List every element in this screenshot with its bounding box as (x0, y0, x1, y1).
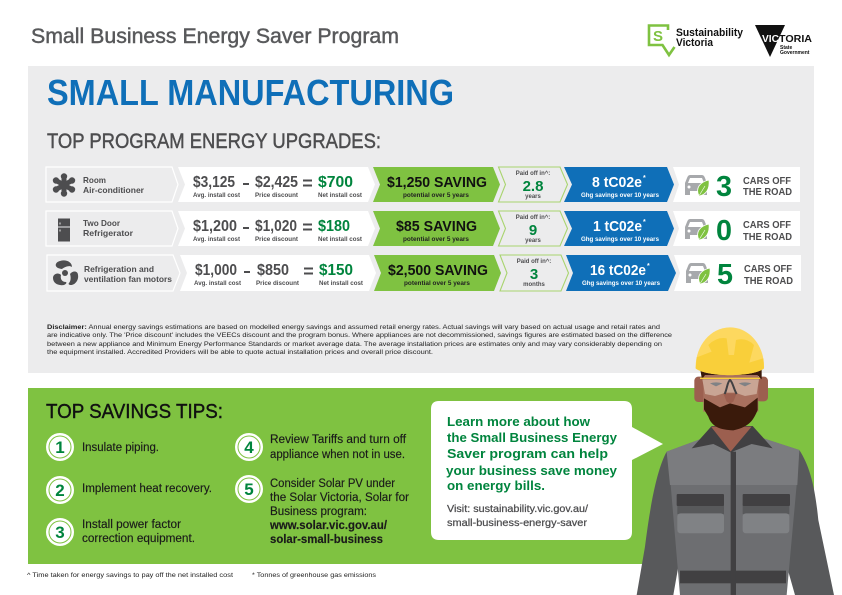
tip 5 (236, 476, 409, 546)
tip 3: Install power factor (82, 519, 181, 531)
cars off the road: CARS OFF (743, 219, 792, 231)
icon: car and leaf (686, 263, 710, 284)
cars off the road: 3 (716, 171, 732, 203)
payback chevron: Paid off in^: (517, 259, 551, 265)
row: refrigeration and ventilation fan motors (47, 255, 801, 291)
collar (692, 426, 773, 452)
emissions chevron (566, 255, 676, 291)
cost equation: $1,020 (255, 218, 297, 235)
hard hat (696, 327, 764, 375)
appliance name (84, 264, 172, 284)
tip 5: 5 (244, 480, 254, 499)
callout: learn more: on energy bills. (447, 479, 545, 493)
icon: fan (53, 260, 78, 285)
emissions chevron: * (647, 263, 650, 270)
disclaimer: the equipment installed. Accredited Providers will be able to quote actual installation prices and overall price discount. (47, 349, 433, 356)
panel: savings tips (28, 388, 814, 564)
tip 5: solar-small-business (270, 534, 383, 546)
cost equation: Price discount (255, 193, 298, 199)
saving chevron: $1,250 SAVING (387, 175, 487, 191)
disclaimer: Disclaimer: Annual energy savings estimations are based on modelled energy savings and assumed retail energy rates. Actual savings will vary based on actual usage and retail rates and (47, 324, 661, 331)
title: program name: Small Business Energy Saver Program (31, 25, 399, 48)
cars off the road: 5 (717, 259, 733, 291)
beard (704, 398, 758, 430)
logo: Victoria State Government: Government (780, 50, 810, 56)
torso (667, 435, 799, 595)
callout: learn more (431, 401, 663, 540)
cost equation: Net install cost (318, 237, 362, 243)
cars off the road (673, 211, 800, 247)
emissions chevron (564, 167, 674, 202)
cost equation: $1,200 (193, 218, 237, 235)
callout: learn more: Learn more about how (447, 415, 590, 429)
payback chevron: years (525, 194, 542, 200)
disclaimer (47, 324, 673, 356)
emissions chevron: * (643, 219, 646, 226)
appliance name (83, 218, 134, 238)
payback chevron: 3 (530, 266, 538, 283)
payback chevron (498, 211, 568, 246)
cost equation (178, 167, 375, 202)
belt (680, 571, 786, 583)
tip 2: Implement heat recovery. (82, 483, 212, 495)
neck (711, 427, 752, 452)
appliance name: Refrigerator (83, 228, 134, 238)
cost equation: $150 (319, 262, 353, 279)
saving chevron (373, 211, 500, 246)
saving chevron: potential over 5 years (404, 280, 471, 287)
logo: Sustainability Victoria (649, 26, 744, 55)
heading: top savings tips: TOP SAVINGS TIPS: (46, 401, 223, 423)
cost equation: Net install cost (319, 281, 363, 287)
payback chevron: years (525, 238, 542, 244)
emissions chevron: * (643, 175, 646, 182)
tip 3: 3 (55, 523, 65, 542)
callout: learn more: the Small Business Energy (447, 431, 617, 445)
row: two door refrigerator (46, 211, 800, 247)
emissions chevron: Ghg savings over 10 years (581, 236, 659, 243)
tip 5: Business program: (270, 506, 367, 518)
cost equation: Avg. install cost (194, 281, 241, 287)
payback chevron: Paid off in^: (516, 171, 550, 177)
footnote: payback: ^ Time taken for energy savings to pay off the net installed cost (27, 572, 233, 579)
cars off the road: CARS OFF (744, 263, 793, 275)
heading: small manufacturing: SMALL MANUFACTURING (47, 72, 454, 113)
saving chevron (374, 255, 501, 291)
saving chevron (373, 167, 500, 202)
cost equation: $850 (257, 262, 289, 279)
tip 5: the Solar Victoria, Solar for (270, 492, 409, 504)
hair (700, 370, 762, 379)
tip 4: appliance when not in use. (270, 449, 405, 461)
logo: Sustainability Victoria: Victoria (676, 37, 714, 49)
icon: car and leaf (685, 175, 709, 196)
cars off the road: THE ROAD (743, 231, 792, 243)
appliance tag (46, 167, 178, 202)
appliance name: Air-conditioner (83, 185, 145, 195)
payback chevron: Paid off in^: (516, 215, 550, 221)
cost equation (180, 255, 376, 291)
saving chevron: $85 SAVING (396, 219, 477, 235)
appliance name (83, 175, 145, 195)
payback chevron: 9 (529, 222, 537, 239)
logo: Victoria State Government: State (780, 45, 792, 51)
cars off the road (674, 255, 801, 291)
emissions chevron: 8 tC02e (592, 174, 642, 191)
disclaimer: between a new appliance and Minimum Energy Performance Standards or market average data. The average installation prices are estimates only and may vary considerably depending on (47, 341, 663, 348)
callout: learn more: your business save money (446, 464, 617, 478)
tip 1: 1 (55, 438, 65, 457)
heading: top program energy upgrades: TOP PROGRAM ENERGY UPGRADES: (47, 130, 381, 153)
safety glasses (700, 378, 760, 403)
row: room air-conditioner (46, 167, 800, 203)
tip 1: Insulate piping. (82, 442, 159, 454)
cost equation: $180 (318, 218, 350, 235)
zip (731, 452, 736, 595)
appliance name: ventilation fan motors (84, 274, 172, 284)
face (703, 370, 758, 412)
icon: snowflake (53, 173, 75, 197)
tip 4: Review Tariffs and turn off (270, 434, 407, 446)
cars off the road: 0 (716, 215, 732, 247)
cost equation: $700 (318, 174, 353, 191)
tip 3: correction equipment. (82, 533, 195, 545)
logo: Victoria State Government: TORIA (779, 33, 812, 45)
appliance tag (47, 255, 180, 291)
callout: learn more: Saver program can help (447, 447, 608, 461)
appliance name: Refrigeration and (84, 264, 154, 274)
payback chevron (500, 255, 568, 291)
tip 5: Consider Solar PV under (270, 478, 395, 490)
emissions chevron: Ghg savings over 10 years (581, 192, 659, 199)
cost equation: Net install cost (318, 193, 362, 199)
tip 2 (48, 478, 212, 502)
emissions chevron: Ghg savings over 10 years (582, 280, 660, 287)
sleeves (637, 452, 681, 595)
tip 3 (48, 519, 195, 545)
cost equation: Avg. install cost (193, 193, 240, 199)
emissions chevron: 1 tC02e (593, 218, 642, 235)
cost equation: $3,125 (193, 174, 235, 191)
callout: learn more: small-business-energy-saver (447, 518, 588, 529)
tip 4 (236, 434, 407, 461)
tip 5: www.solar.vic.gov.au/ (269, 520, 388, 532)
emissions chevron (564, 211, 674, 246)
payback chevron (498, 167, 568, 202)
appliance tag (46, 211, 178, 246)
chest pockets (677, 494, 790, 533)
tip 4: 4 (244, 438, 254, 457)
cars off the road: THE ROAD (743, 186, 792, 198)
logo: Sustainability Victoria: Sustainability (676, 27, 744, 39)
icon: car and leaf (685, 219, 709, 240)
cost equation: $2,425 (255, 174, 298, 191)
logo: Sustainability Victoria: S (653, 28, 663, 45)
saving chevron: potential over 5 years (403, 236, 470, 243)
payback chevron: 2.8 (523, 178, 543, 195)
cost equation: Price discount (255, 237, 298, 243)
tip 1 (48, 434, 159, 460)
disclaimer: are indicative only. The 'Price discount' includes the VEECs discount and the program bonus. Where appliances are not decommissioned, savings figures are estimated based on the difference (47, 332, 673, 339)
appliance name: Two Door (83, 218, 121, 228)
emissions chevron: 16 tC02e (590, 262, 646, 279)
cost equation (178, 211, 375, 246)
cars off the road: CARS OFF (743, 175, 792, 187)
payback chevron: months (523, 282, 545, 288)
logo: Victoria State Government (755, 25, 812, 57)
cost equation: Avg. install cost (193, 237, 240, 243)
tip 2: 2 (55, 481, 65, 500)
footnote: emissions: * Tonnes of greenhouse gas emissions (252, 572, 377, 579)
illustration: worker (637, 327, 834, 595)
cost equation: Price discount (256, 281, 299, 287)
ears (694, 377, 768, 402)
cost equation: $1,000 (195, 262, 237, 279)
appliance name: Room (83, 175, 106, 185)
callout: learn more: Visit: sustainability.vic.gov.au/ (447, 504, 588, 515)
cars off the road: THE ROAD (744, 275, 793, 287)
saving chevron: potential over 5 years (403, 192, 470, 199)
saving chevron: $2,500 SAVING (388, 263, 488, 279)
cars off the road (673, 167, 800, 203)
logo: Victoria State Government: VIC (762, 33, 779, 45)
icon: refrigerator (58, 218, 70, 242)
panel: upgrades (28, 66, 814, 373)
